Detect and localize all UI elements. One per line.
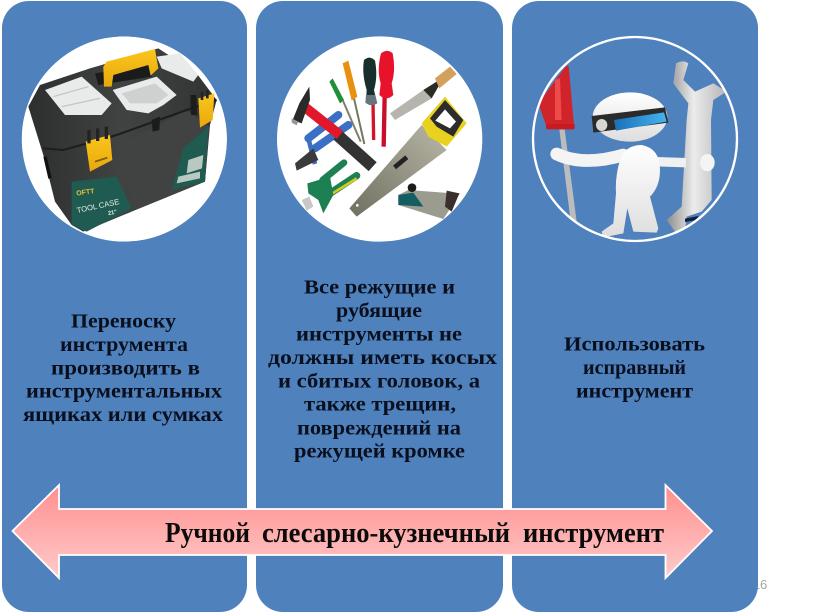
- text: proper tool rule: исправный: [583, 357, 686, 379]
- image: robot figure with screwdriver and wrench: [533, 37, 737, 241]
- text: toolbox rule: ящиках или сумках: [23, 404, 223, 426]
- text: cutting tools rule: рубящие: [336, 300, 422, 322]
- text: cutting tools rule: также трещин,: [304, 394, 456, 416]
- panel: toolbox rule: [2, 1, 247, 612]
- text: cutting tools rule: и сбитых головок, а: [278, 370, 480, 392]
- arrow label: инструмент: [523, 518, 664, 549]
- text: cutting tools rule: должны иметь косых: [268, 347, 497, 369]
- image: hand tools in circle: [277, 36, 482, 242]
- text: toolbox rule: производить в: [51, 358, 200, 380]
- text: toolbox rule: инструмента: [60, 334, 188, 356]
- arrow label: слесарно-кузнечный: [262, 518, 510, 549]
- text: cutting tools rule: Все режущие и: [304, 276, 455, 298]
- text: toolbox rule: Переноску: [71, 310, 176, 332]
- text: proper tool rule: Использовать: [564, 334, 705, 356]
- arrow banner: [12, 485, 712, 578]
- panel: proper tool rule: [512, 1, 758, 612]
- arrow label: Ручной: [165, 518, 250, 549]
- image: toolbox in circle: OFTT: [76, 188, 96, 198]
- text: proper tool rule: [564, 334, 705, 402]
- image: toolbox in circle: [22, 36, 227, 242]
- text: toolbox rule: [23, 310, 223, 426]
- text: proper tool rule: инструмент: [576, 380, 693, 402]
- arrow label: [165, 518, 664, 549]
- image: toolbox in circle: TOOL CASE: [76, 197, 120, 215]
- panel: cutting tools rule: [256, 1, 503, 612]
- text: cutting tools rule: повреждений на: [297, 418, 461, 440]
- text: toolbox rule: инструментальных: [26, 380, 222, 402]
- page number: 16: [753, 577, 767, 592]
- image: toolbox in circle: 21": [108, 209, 118, 217]
- text: cutting tools rule: инструменты не: [296, 324, 462, 346]
- text: cutting tools rule: режущей кромке: [294, 440, 465, 462]
- text: cutting tools rule: [268, 276, 497, 462]
